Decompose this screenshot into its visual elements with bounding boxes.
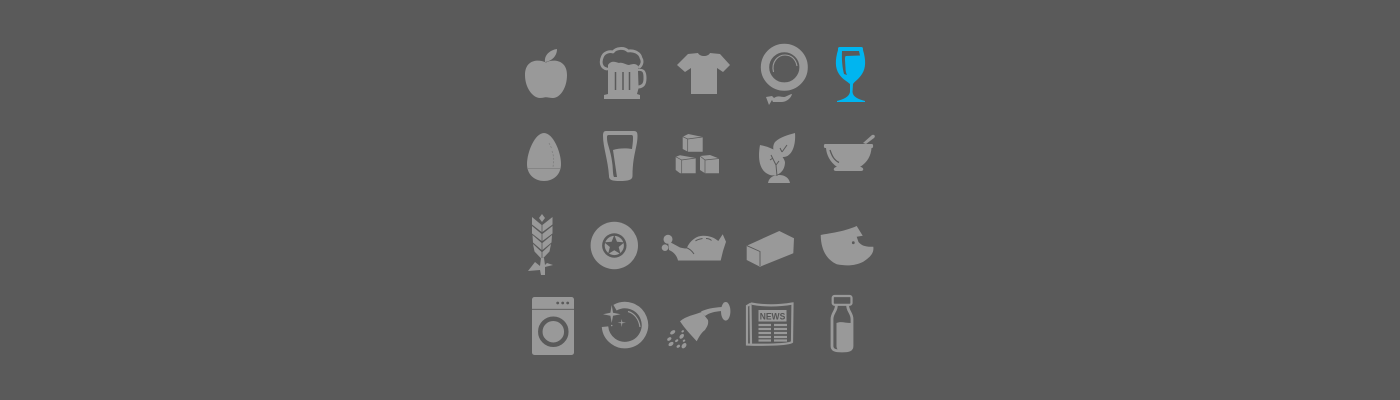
icon: plate on hand xyxy=(765,48,804,105)
icon: washing machine xyxy=(532,297,574,355)
icon: wine glass xyxy=(836,47,865,102)
icon: shower head with grains xyxy=(667,302,730,349)
icon: pint glass xyxy=(603,131,638,181)
icon: leaves sprout xyxy=(759,133,795,183)
icon: newspaper: NEWS xyxy=(760,311,785,322)
icon: tyre xyxy=(591,222,638,269)
icon: apple xyxy=(525,49,567,98)
icon: beer mug xyxy=(601,48,646,99)
icon: mortar and pestle xyxy=(824,135,875,171)
icon: bitten ham xyxy=(821,226,873,265)
icon: egg xyxy=(527,133,561,181)
icon: sugar cubes xyxy=(676,134,719,173)
icon: newspaper xyxy=(747,304,792,345)
icon: bottle xyxy=(832,296,852,351)
icon: roast chicken xyxy=(662,234,726,260)
icon: butter block xyxy=(747,231,794,267)
icon: sparkling clean plate xyxy=(603,305,645,345)
icon: t-shirt xyxy=(677,53,730,94)
icon: wheat xyxy=(528,214,553,275)
